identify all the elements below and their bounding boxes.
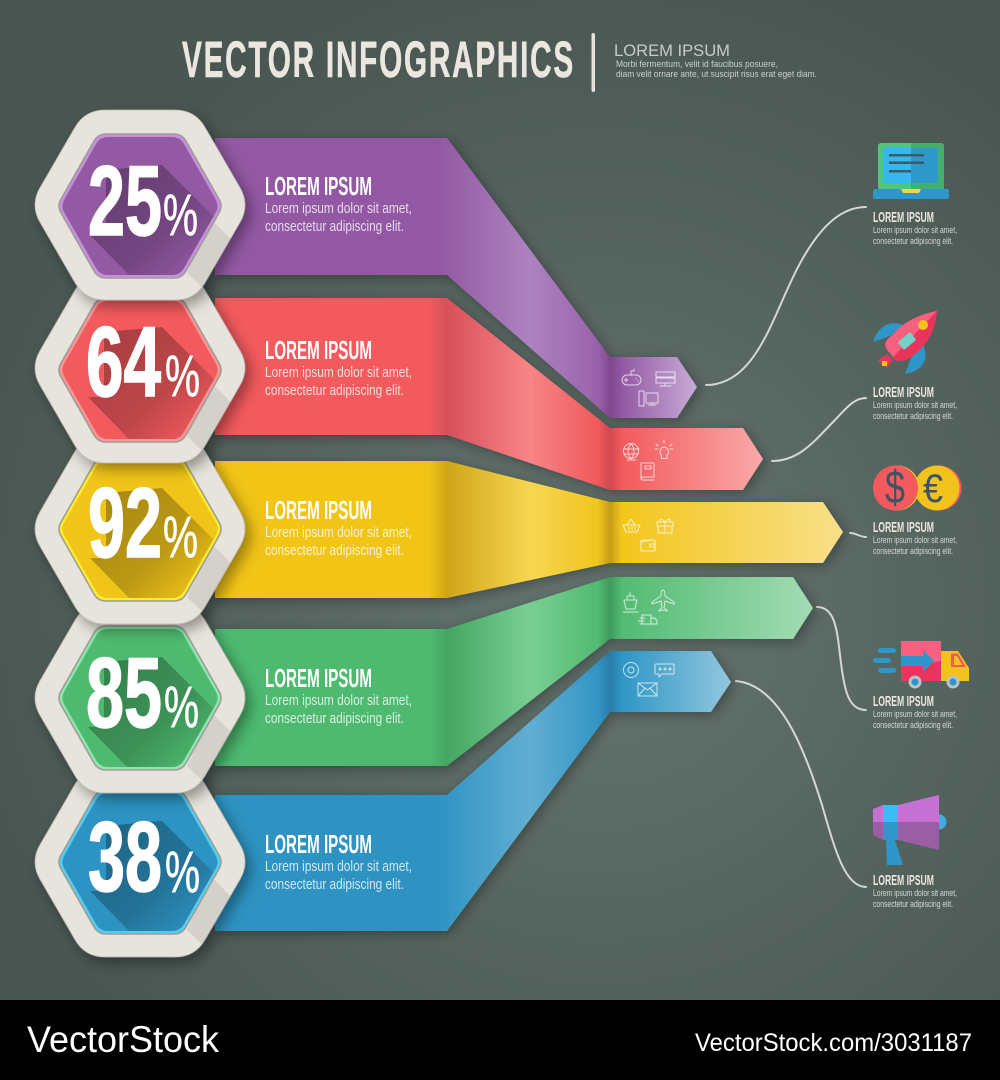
label: rocket: consectetur adipiscing elit. bbox=[873, 411, 953, 421]
panel text: blue bbox=[265, 829, 412, 893]
panel text: red bbox=[265, 335, 412, 399]
ribbon: red bbox=[215, 298, 763, 490]
hexagon: 25%: 25 bbox=[88, 145, 162, 256]
footer bar: VectorStock bbox=[27, 1019, 219, 1060]
label: coins: Lorem ipsum dolor sit amet, bbox=[873, 535, 957, 545]
icon: rocket bbox=[873, 311, 937, 374]
panel text: yellow: LOREM IPSUM bbox=[265, 495, 372, 525]
panel text: green bbox=[265, 663, 412, 727]
label: coins bbox=[873, 519, 957, 556]
hexagon: 38%: 38 bbox=[88, 801, 162, 912]
label: laptop: LOREM IPSUM bbox=[873, 209, 934, 226]
title: LOREM IPSUM bbox=[614, 41, 730, 60]
hexagon: 25%: % bbox=[163, 183, 198, 248]
title: VECTOR INFOGRAPHICS bbox=[182, 31, 575, 88]
line icons: yellow arrow bbox=[623, 519, 673, 551]
title: Morbi fermentum, velit id faucibus posuere, bbox=[616, 59, 778, 69]
panel text: green: Lorem ipsum dolor sit amet, bbox=[265, 692, 412, 709]
ribbon: yellow bbox=[215, 461, 843, 598]
line icons: green arrow bbox=[623, 590, 674, 624]
hexagon: 64%: % bbox=[165, 344, 200, 409]
icon: laptop bbox=[873, 143, 949, 199]
ribbon: green bbox=[215, 577, 813, 766]
label: truck: Lorem ipsum dolor sit amet, bbox=[873, 709, 957, 719]
label: rocket: Lorem ipsum dolor sit amet, bbox=[873, 400, 957, 410]
icon: coins: $ bbox=[885, 461, 905, 513]
title: diam velit ornare ante, ut suscipit risus erat eget diam. bbox=[616, 69, 817, 79]
hexagon: 64% bbox=[35, 273, 246, 463]
hexagon: 64%: 64 bbox=[86, 306, 161, 417]
label: megaphone: LOREM IPSUM bbox=[873, 872, 934, 889]
label: truck bbox=[873, 693, 957, 730]
ribbon: purple bbox=[215, 138, 697, 418]
line icons: purple arrow bbox=[622, 369, 675, 406]
icon: coins: € bbox=[923, 467, 943, 511]
icon: megaphone bbox=[873, 795, 947, 865]
panel text: yellow: Lorem ipsum dolor sit amet, bbox=[265, 524, 412, 541]
panel text: blue: LOREM IPSUM bbox=[265, 829, 372, 859]
connector curves bbox=[706, 207, 866, 887]
panel text: blue: Lorem ipsum dolor sit amet, bbox=[265, 858, 412, 875]
panel text: red: LOREM IPSUM bbox=[265, 335, 372, 365]
label: coins: consectetur adipiscing elit. bbox=[873, 546, 953, 556]
panel text: red: consectetur adipiscing elit. bbox=[265, 382, 404, 399]
panel text: red: Lorem ipsum dolor sit amet, bbox=[265, 364, 412, 381]
label: rocket: LOREM IPSUM bbox=[873, 384, 934, 401]
panel text: yellow: consectetur adipiscing elit. bbox=[265, 542, 404, 559]
line icons: blue arrow bbox=[624, 662, 674, 696]
panel text: green: consectetur adipiscing elit. bbox=[265, 710, 404, 727]
label: laptop: consectetur adipiscing elit. bbox=[873, 236, 953, 246]
icon: coins bbox=[873, 461, 962, 513]
icon: delivery truck bbox=[873, 641, 969, 688]
hexagon: 92%: 92 bbox=[88, 467, 162, 578]
hexagon: 85% bbox=[35, 603, 246, 793]
label: megaphone: Lorem ipsum dolor sit amet, bbox=[873, 888, 957, 898]
label: megaphone: consectetur adipiscing elit. bbox=[873, 899, 953, 909]
hexagon: 92% bbox=[35, 434, 246, 624]
panel text: purple: consectetur adipiscing elit. bbox=[265, 218, 404, 235]
footer bar: VectorStock.com/3031187 bbox=[695, 1029, 972, 1057]
label: laptop: Lorem ipsum dolor sit amet, bbox=[873, 225, 957, 235]
hexagon: 38%: % bbox=[165, 840, 200, 905]
panel text: green: LOREM IPSUM bbox=[265, 663, 372, 693]
ribbon: blue bbox=[215, 651, 731, 931]
footer bar bbox=[0, 1000, 1000, 1080]
hexagon: 92%: % bbox=[163, 505, 198, 570]
label: laptop bbox=[873, 209, 957, 246]
label: truck: LOREM IPSUM bbox=[873, 693, 934, 710]
panel text: purple bbox=[265, 171, 412, 235]
hexagon: 85%: 85 bbox=[86, 637, 162, 748]
label: coins: LOREM IPSUM bbox=[873, 519, 934, 536]
hexagon: 38% bbox=[35, 767, 246, 957]
label: megaphone bbox=[873, 872, 957, 909]
label: truck: consectetur adipiscing elit. bbox=[873, 720, 953, 730]
panel text: purple: Lorem ipsum dolor sit amet, bbox=[265, 200, 412, 217]
hexagon: 25% bbox=[35, 110, 246, 300]
label: rocket bbox=[873, 384, 957, 421]
panel text: purple: LOREM IPSUM bbox=[265, 171, 372, 201]
panel text: blue: consectetur adipiscing elit. bbox=[265, 876, 404, 893]
line icons: red arrow bbox=[624, 440, 673, 480]
hexagon: 85%: % bbox=[164, 675, 199, 740]
panel text: yellow bbox=[265, 495, 412, 559]
